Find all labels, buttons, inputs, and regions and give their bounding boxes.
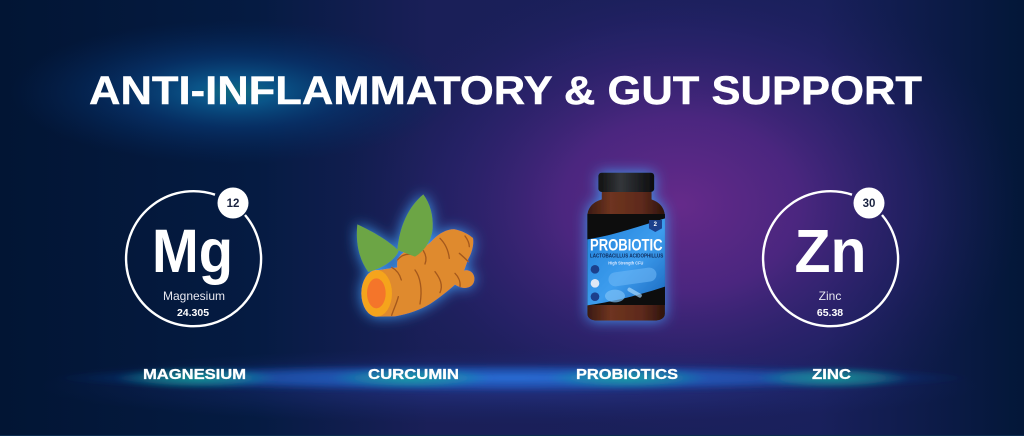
icon: magnesium element: 24.305 [177,307,209,319]
icon: zinc element: Zinc [819,289,841,303]
product name: PROBIOTIC [590,236,663,255]
icon: magnesium element [126,188,261,326]
icon: probiotic bottle: LACTOBACILLUS ACIDOPHILLUS [590,254,664,260]
icon: magnesium element: Mg [152,217,233,285]
icon: zinc element [763,188,898,326]
badges [591,265,599,274]
black label band [587,214,665,305]
cap [598,173,654,192]
leaf left [357,224,399,272]
label: zinc: ZINC [812,366,851,383]
icon: magnesium element: 12 [227,198,239,210]
icon: zinc element: Zn [794,217,866,285]
badge [649,220,662,232]
icon: probiotic bottle: 2 [654,222,658,228]
icon: magnesium element: Magnesium [163,289,225,303]
blue label [587,218,665,305]
cut end [361,270,392,317]
icon: probiotic bottle [587,173,665,321]
label: magnesium: MAGNESIUM [143,366,246,383]
bacteria [608,267,657,287]
bottom light bar glow [40,348,984,424]
icon: curcumin turmeric root [357,194,474,317]
root grooves [392,236,469,315]
icon: probiotic bottle: High Strength CFU [608,261,643,266]
bottle body [587,192,665,321]
title: ANTI-INFLAMMATORY & GUT SUPPORT [89,69,922,113]
label: probiotics: PROBIOTICS [576,366,678,383]
root body [375,229,474,317]
icon: zinc element: 65.38 [817,307,843,319]
icon: zinc element: 30 [863,198,875,210]
label: curcumin: CURCUMIN [368,366,459,383]
leaf right [397,194,433,257]
